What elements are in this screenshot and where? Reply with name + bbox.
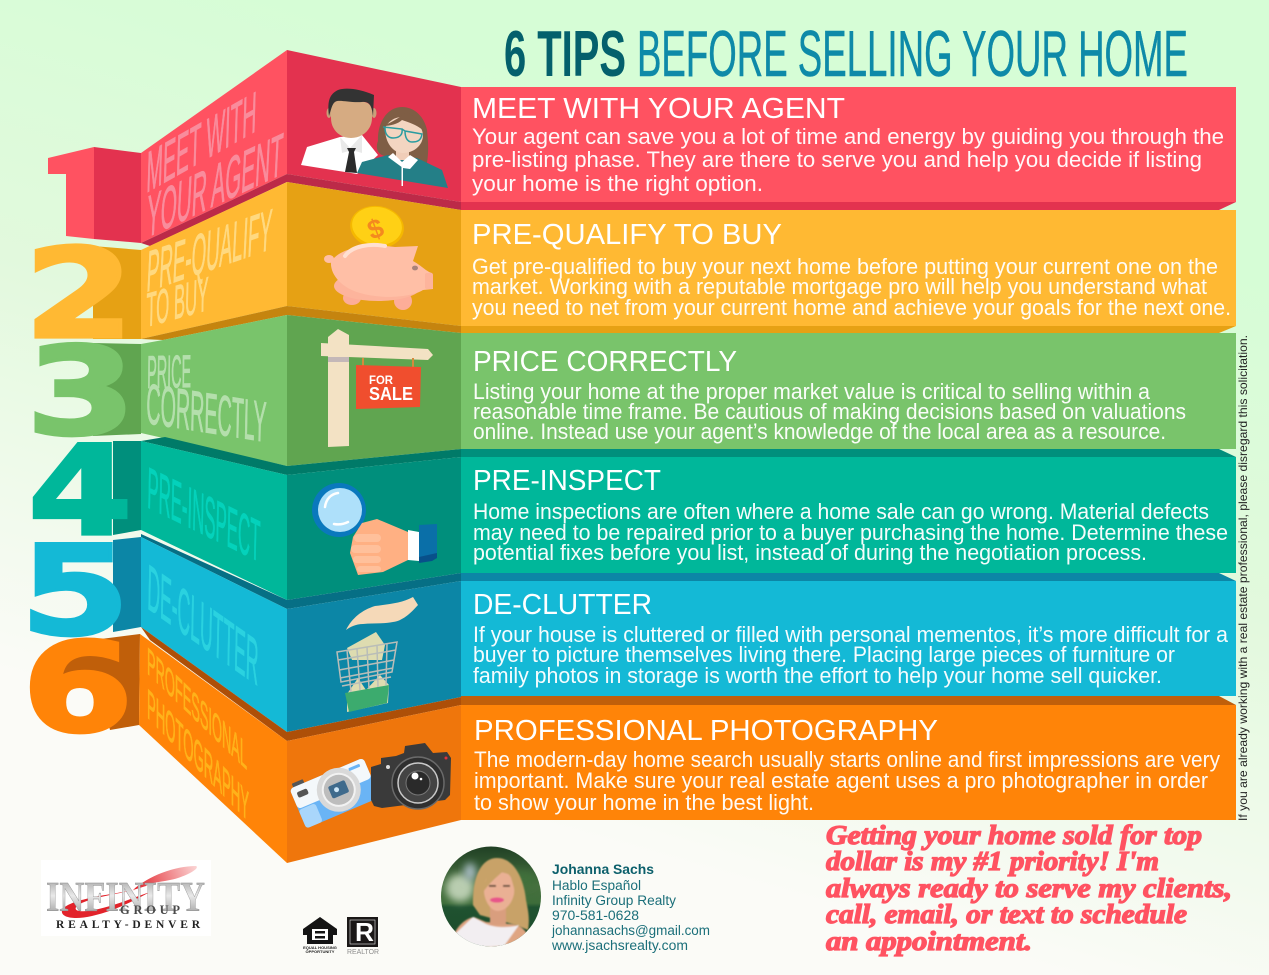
front face — [287, 705, 461, 863]
strip under front face — [287, 306, 461, 333]
numeral 1 — [48, 147, 141, 243]
contact details: Johanna Sachs — [552, 861, 654, 877]
icon: for sale sign — [321, 329, 433, 447]
body text: your home is the right option. — [472, 171, 763, 196]
logo: infinity group realty: REALTY-DENVER — [56, 919, 201, 931]
body text: Listing your home at the proper market value is critical to selling within a — [473, 379, 1150, 404]
heading: PRE-QUALIFY TO BUY — [472, 219, 782, 251]
side face: professional photography — [139, 634, 287, 863]
icon: realtor mark: R — [355, 917, 374, 947]
body text — [474, 747, 1221, 815]
numeral 3: 3 — [26, 322, 136, 463]
numeral 6: 6 — [22, 616, 133, 760]
side face: professional photography: PHOTOGRAPHY — [147, 680, 249, 832]
heading: DE-CLUTTER — [473, 589, 652, 621]
front face — [287, 182, 461, 326]
step 4: numeral, 3D faces, icon — [28, 420, 461, 609]
body text: Get pre-qualified to buy your next home before putting your current one on the — [472, 254, 1218, 279]
icon: for sale sign: SALE — [369, 384, 413, 404]
panel: pre-inspect — [461, 457, 1236, 581]
numeral 1: 1 — [35, 123, 118, 269]
icon: equal housing opportunity: EQUAL HOUSING — [303, 945, 337, 950]
step 2: numeral, 3D faces, icon — [24, 182, 461, 367]
body text: family photos in storage is worth the effort to help your home sell quicker. — [473, 663, 1162, 688]
strip under front face — [287, 174, 461, 210]
strip under front face — [287, 697, 461, 741]
body text: you need to net from your current home and achieve your goals for the next one. — [472, 295, 1231, 320]
side face: meet with your agent: MEET WITH — [146, 80, 258, 206]
tagline: an appointment. — [826, 926, 1032, 956]
numeral 2: 2 — [24, 223, 134, 367]
title: 6 TIPS — [504, 17, 626, 90]
logo: infinity group realty — [41, 860, 211, 936]
contact details: Hablo Español — [552, 878, 641, 893]
body text: market. Working with a reputable mortgage pro will help you understand what — [472, 274, 1208, 299]
front face — [287, 457, 461, 600]
body text: The modern-day home search usually starts online and first impressions are very — [474, 747, 1221, 772]
strip under front face — [287, 449, 461, 475]
icon: piggy bank — [324, 202, 433, 310]
side face: price correctly: PRICE — [147, 345, 191, 398]
step 3: numeral, 3D faces, icon — [26, 315, 461, 475]
icon: equal housing opportunity — [303, 917, 337, 954]
body text: potential fixes before you list, instead of during the negotiation process. — [473, 540, 1147, 565]
panel: professional photography — [461, 705, 1236, 820]
panel: price correctly — [461, 333, 1236, 457]
side face: pre-qualify to buy: TO BUY — [146, 269, 209, 338]
front face — [287, 50, 461, 202]
logo: infinity group realty: GROUP — [120, 903, 180, 917]
vertical disclaimer: If you are already working with a real estate professional, please disregard this solicitation. — [1236, 335, 1250, 821]
icon: realtor mark — [347, 917, 379, 956]
side face: pre-qualify to buy — [141, 182, 287, 340]
logo: infinity group realty: INFINITY — [46, 875, 205, 921]
heading: PROFESSIONAL PHOTOGRAPHY — [474, 715, 938, 747]
side face: meet with your agent: YOUR AGENT — [145, 121, 285, 252]
heading: PRICE CORRECTLY — [473, 346, 737, 378]
body text — [472, 254, 1231, 320]
icon: hand with magnifier — [312, 483, 437, 575]
front face — [287, 315, 461, 466]
step 6: numeral, 3D faces, icon — [22, 616, 461, 863]
heading: PRE-INSPECT — [473, 465, 661, 497]
body text — [473, 499, 1228, 565]
panel: de-clutter — [461, 581, 1236, 705]
icon: for sale sign: FOR — [369, 375, 394, 387]
strip under front face — [287, 573, 461, 609]
side face: de-clutter: DE-CLUTTER — [147, 550, 259, 700]
body text: important. Make sure your real estate agent uses a pro photographer in order — [474, 768, 1208, 793]
panel: pre-qualify to buy — [461, 210, 1236, 333]
side face: price correctly: CORRECTLY — [146, 373, 267, 455]
body text: buyer to picture themselves living there. Placing large pieces of furniture or — [473, 642, 1175, 667]
contact details: johannasachs@gmail.com — [551, 923, 710, 938]
contact details: www.jsachsrealty.com — [551, 938, 688, 953]
tagline: dollar is my #1 priority! I'm — [826, 846, 1159, 876]
side face: pre-qualify to buy: PRE-QUALIFY — [145, 196, 274, 305]
body text: online. Instead use your agent’s knowledge of the local area as a resource. — [473, 419, 1166, 444]
step 1: numeral, 3D faces, icon — [48, 50, 461, 246]
body text: may need to be repaired prior to a buyer purchasing the home. Determine these — [473, 520, 1228, 545]
front face — [287, 581, 461, 732]
tagline: call, email, or text to schedule — [826, 899, 1187, 929]
tagline — [826, 820, 1232, 956]
body text — [473, 379, 1186, 444]
panel: meet with your agent — [461, 87, 1236, 210]
body text: Home inspections are often where a home sale can go wrong. Material defects — [473, 499, 1209, 524]
icon: equal housing opportunity: OPPORTUNITY — [306, 949, 335, 954]
body text: Your agent can save you a lot of time and energy by guiding you through the — [472, 124, 1224, 149]
tagline: Getting your home sold for top — [826, 820, 1202, 850]
contact details: 970-581-0628 — [552, 908, 639, 923]
side face: meet with your agent — [141, 50, 287, 252]
agent portrait — [440, 846, 542, 948]
icon: realtor mark: REALTOR — [347, 949, 379, 956]
icon: cameras — [288, 743, 451, 829]
icon: piggy bank: $ — [363, 212, 388, 246]
contact details — [551, 861, 710, 953]
numeral 4: 4 — [28, 420, 132, 564]
icon: hand and waste basket — [337, 597, 418, 712]
side face: price correctly — [141, 315, 287, 475]
body text: to show your home in the best light. — [474, 790, 814, 815]
side face: pre-inspect: PRE-INSPECT — [147, 456, 261, 575]
tagline: always ready to serve my clients, — [826, 873, 1232, 903]
body text — [472, 124, 1224, 196]
body text: pre-listing phase. They are there to serve you and help you decide if listing — [472, 147, 1202, 172]
step 5: numeral, 3D faces, icon — [20, 520, 461, 741]
body text: reasonable time frame. Be cautious of making decisions based on valuations — [473, 399, 1186, 424]
body text: If your house is cluttered or filled with personal mementos, it’s more difficult for a — [473, 622, 1228, 647]
numeral 5: 5 — [20, 520, 130, 664]
body text — [473, 622, 1228, 688]
heading: MEET WITH YOUR AGENT — [472, 93, 845, 125]
icon: agents — [301, 89, 448, 188]
contact details: Infinity Group Realty — [552, 893, 676, 908]
side face: professional photography: PROFESSIONAL — [147, 640, 247, 779]
